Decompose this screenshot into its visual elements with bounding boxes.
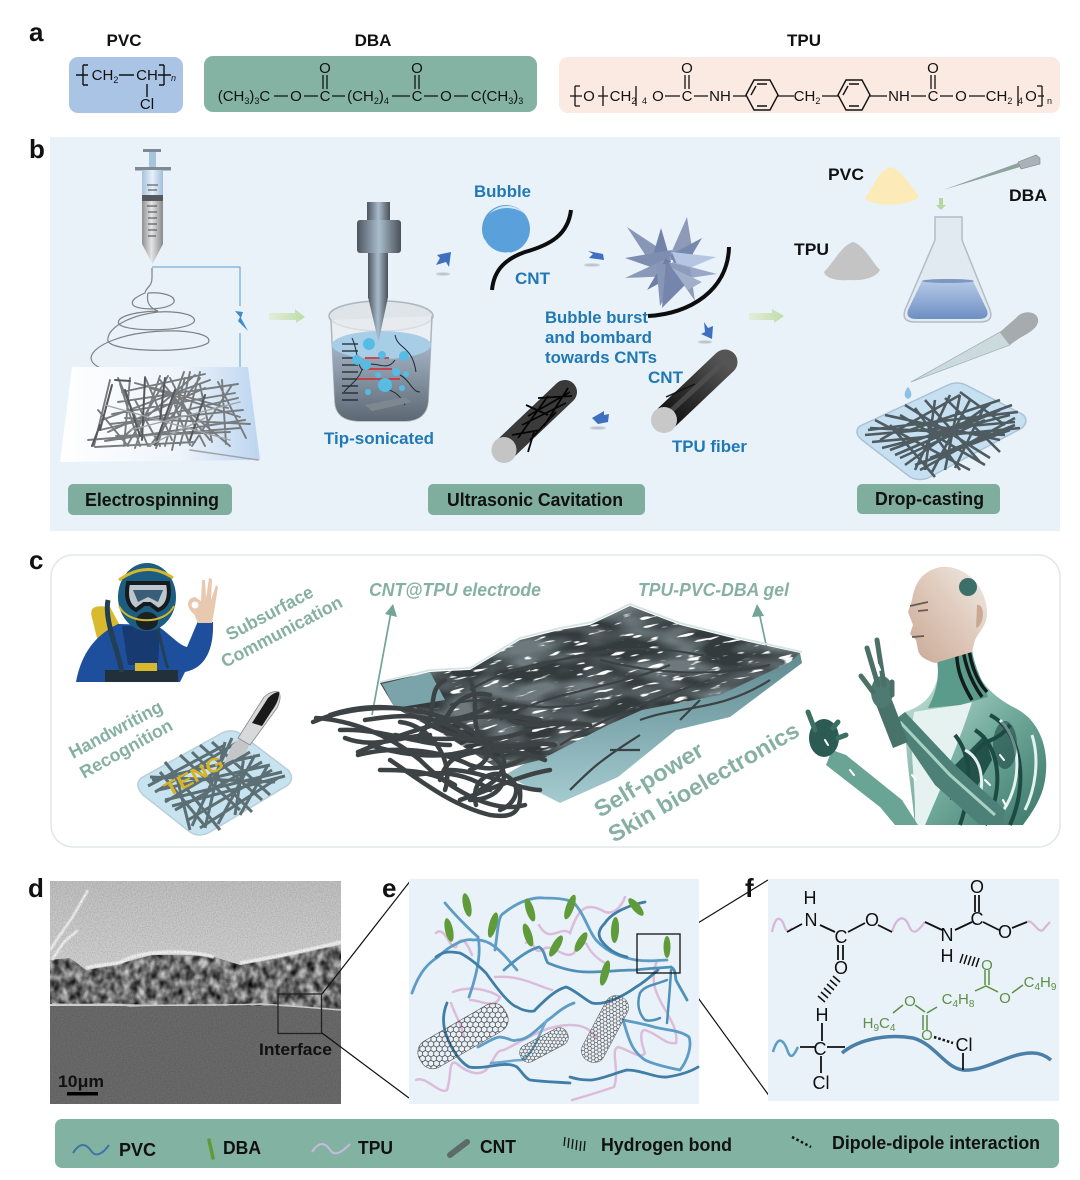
- electrospun jet spiral: [91, 268, 209, 377]
- DBA molecule: 4: [890, 1023, 896, 1034]
- TPU carbamate backbone: H: [804, 888, 816, 908]
- label: tip-sonicated: Tip-sonicated: [324, 429, 434, 448]
- PVC structure card: Cl: [140, 96, 154, 113]
- panel label b: b: [29, 134, 45, 164]
- PVC backbone: Cl: [956, 1035, 972, 1055]
- icon: TPU powder heap: [824, 242, 880, 280]
- legend: TPU: TPU: [358, 1138, 393, 1158]
- DBA structure card: 3: [518, 96, 523, 106]
- CNT wire bundle: [313, 680, 590, 816]
- panel b background: [50, 137, 1060, 531]
- panel label e: e: [382, 873, 396, 903]
- label: CNT: CNT: [515, 269, 551, 288]
- dipole-dipole dots: [934, 1037, 953, 1043]
- legend: CNT: CNT: [480, 1137, 516, 1157]
- step label: electrospinning: Electrospinning: [85, 490, 219, 510]
- label: TPU fiber: TPU fiber: [672, 437, 747, 456]
- interaction background: [768, 879, 1059, 1101]
- handwriting device: [138, 692, 292, 835]
- DBA molecule: [863, 957, 1057, 1044]
- DBA structure card: O: [440, 88, 452, 105]
- TPU structure card: CH: [610, 88, 631, 105]
- label: interface: Interface: [259, 1040, 332, 1059]
- TPU carbamate backbone: O: [865, 910, 879, 930]
- PVC chains: [412, 898, 698, 1083]
- icon: TPU fiber: [651, 358, 728, 433]
- DBA structure card: O: [411, 60, 423, 77]
- TPU structure card: C: [682, 88, 693, 105]
- DBA molecule: O: [999, 990, 1011, 1007]
- benzene ring: [838, 80, 870, 110]
- DBA structure card: ): [249, 88, 254, 105]
- PVC backbone: H: [816, 1005, 828, 1025]
- DBA molecule: C: [942, 991, 952, 1008]
- inset box for panel f: [637, 934, 680, 973]
- shoulder panel: [993, 721, 1017, 769]
- head: [908, 567, 987, 663]
- text: handwriting recognition: Handwriting: [65, 697, 166, 763]
- TPU structure card: O: [583, 88, 595, 105]
- DBA molecule: C: [879, 1015, 890, 1032]
- DBA structure card: (CH: [218, 88, 244, 105]
- DBA molecule: H: [863, 1015, 873, 1032]
- arrow: cavitation to drop-casting: [749, 309, 784, 323]
- DBA structure card: ): [379, 88, 384, 105]
- DBA molecule: 9: [1051, 982, 1057, 993]
- arrow: to electrode: [372, 604, 397, 715]
- label: TPU-PVC-DBA gel: TPU-PVC-DBA gel: [638, 580, 790, 600]
- text: subsurface communication: Communication: [218, 592, 346, 672]
- torso: [905, 668, 1046, 825]
- raised hand palm: [871, 676, 893, 708]
- panel e: polymer network: [382, 873, 699, 1104]
- neck: [928, 650, 988, 708]
- legend: TPU: [312, 1138, 393, 1158]
- TPU structure card: O: [652, 88, 664, 105]
- panel a: chemical structures: [29, 17, 1060, 113]
- DBA molecule: H: [958, 991, 969, 1008]
- SEM micrograph: [50, 881, 341, 1104]
- label: bubble burst text: Bubble burst: [545, 308, 648, 327]
- raised hand fingers: [861, 640, 892, 695]
- TPU structure card: 2: [815, 96, 820, 106]
- network background: [409, 879, 699, 1104]
- text: self-power skin bioelectronics: Self-power: [589, 737, 708, 822]
- electrospun fiber mat: [88, 372, 258, 460]
- panel b: fabrication process: [29, 134, 1060, 531]
- DBA structure card: C: [412, 88, 423, 105]
- PVC backbone: Cl: [812, 1073, 830, 1093]
- DBA structure card: C: [259, 88, 270, 105]
- PVC backbone: [773, 1005, 1051, 1093]
- icon: diver: [76, 563, 218, 682]
- step label: drop-casting: Drop-casting: [875, 489, 984, 509]
- legend: PVC: PVC: [119, 1140, 156, 1160]
- PVC structure card: CH: [92, 67, 113, 84]
- DBA structure card: 2: [374, 96, 379, 106]
- dark ribs and side panels: [950, 735, 992, 800]
- DBA structure card: (CH: [347, 88, 374, 105]
- arrow: to gel: [752, 604, 769, 658]
- arrow: to coated fiber: [590, 411, 609, 430]
- TPU structure card: O: [1025, 88, 1037, 105]
- interface inset box: [278, 994, 322, 1034]
- arrow: electrospinning to cavitation: [269, 309, 305, 323]
- label: CNT near fiber: CNT: [648, 368, 684, 387]
- TPU structure card: NH: [709, 88, 731, 105]
- panel f: molecular interactions: [745, 873, 1059, 1101]
- facial features: [910, 602, 928, 637]
- DBA molecule: 8: [969, 999, 975, 1010]
- TPU structure card: O: [927, 60, 939, 77]
- TPU carbamate backbone: N: [804, 910, 818, 930]
- TPU carbamate backbone: [787, 877, 1027, 978]
- CNT tube large: [413, 999, 513, 1073]
- DBA molecule: 4: [952, 999, 958, 1010]
- step label: ultrasonic cavitation: Ultrasonic Cavitation: [447, 490, 623, 510]
- legend: DBA: DBA: [223, 1138, 261, 1158]
- hydrogen bond hatch: [818, 976, 840, 1002]
- chest highlight: [912, 702, 972, 825]
- TPU wave segments: [772, 918, 1050, 932]
- DBA structure card: C(CH: [471, 88, 508, 105]
- gel slab with CNT network: [380, 603, 802, 803]
- DBA molecule: C: [1024, 974, 1034, 991]
- TPU carbamate backbone: H: [940, 946, 954, 966]
- text: self-power skin bioelectronics: Skin bioelectronics: [604, 717, 804, 847]
- PVC structure card: 2: [113, 75, 118, 85]
- panel label d: d: [28, 873, 44, 903]
- TPU structure card: CH: [986, 88, 1007, 105]
- gel card with CNT mesh: [857, 383, 1026, 480]
- TPU carbamate backbone: C: [834, 927, 848, 947]
- TPU carbamate backbone: N: [940, 925, 954, 945]
- DBA molecule: O: [904, 993, 916, 1010]
- neck cables: [957, 634, 987, 700]
- legend: CNT: [450, 1137, 516, 1157]
- icon: conical flask: [904, 217, 991, 322]
- panel c: applications: [30, 554, 1061, 848]
- icon: PVC powder heap: [865, 167, 919, 205]
- TPU structure card: CH: [794, 88, 815, 105]
- DBA molecule: O: [981, 957, 993, 974]
- TPU structure card: C: [928, 88, 939, 105]
- body highlights: [965, 720, 1036, 815]
- CNT arc: [648, 247, 729, 316]
- icon: tip sonicator beaker: [329, 202, 433, 421]
- text: subsurface communication: Subsurface: [222, 582, 317, 645]
- icon: syringe: [135, 149, 171, 264]
- panel label f: f: [745, 873, 754, 903]
- DBA heading: DBA: [355, 31, 391, 50]
- icon: pen: [224, 692, 280, 764]
- DBA structure card: 3: [244, 96, 249, 106]
- PVC structure card: CH: [136, 67, 158, 84]
- forearm highlight: [900, 722, 995, 815]
- PVC heading: PVC: [107, 31, 141, 50]
- icon: DBA pipette: [943, 155, 1040, 190]
- DBA structure card: [204, 56, 537, 112]
- step label: drop-casting: [857, 484, 1000, 514]
- high-voltage wire with spark: [152, 267, 248, 385]
- TPU structure card: 2: [631, 96, 636, 106]
- PVC backbone: C: [814, 1039, 826, 1059]
- arrow: to TPU fiber: [698, 322, 713, 344]
- DBA structure card: ): [513, 88, 518, 105]
- panel c frame: [51, 555, 1060, 847]
- step label: electrospinning: [68, 484, 232, 515]
- DBA molecule: O: [921, 1027, 933, 1044]
- scale bar 10 µm: 10μm: [58, 1072, 104, 1091]
- text: handwriting recognition: Recognition: [76, 715, 176, 782]
- sparkle points: [825, 665, 1006, 806]
- icon: DBA droplet arrow: [936, 198, 946, 210]
- arrow: to burst: [584, 251, 604, 266]
- label: TPU powder: TPU: [794, 240, 829, 259]
- DBA molecule: 4: [1034, 982, 1040, 993]
- illustration: humanoid robot: [808, 567, 1046, 825]
- DBA structure card: 3: [254, 96, 259, 106]
- DBA structure card: 4: [384, 96, 389, 106]
- DBA molecule: 9: [873, 1023, 879, 1034]
- panel d: SEM image: [28, 873, 341, 1104]
- label: bubble burst text: [545, 308, 657, 367]
- TPU carbamate backbone: O: [834, 958, 848, 978]
- TPU structure card: O: [955, 88, 967, 105]
- TPU carbamate backbone: O: [970, 877, 984, 897]
- icon: dropper: [905, 312, 1038, 399]
- TPU structure card: 4: [642, 96, 647, 106]
- body circuit streaks: [955, 715, 1020, 825]
- DBA molecules: [443, 892, 670, 987]
- TPU structure card: 2: [1007, 96, 1012, 106]
- panel label c: c: [29, 545, 43, 575]
- head implant: [959, 578, 977, 596]
- step label: ultrasonic cavitation: [428, 484, 645, 515]
- PVC structure card: n: [171, 73, 176, 83]
- icon: bubble on CNT: [482, 205, 571, 290]
- PVC structure card: [69, 57, 183, 113]
- DBA structure card: C: [320, 88, 331, 105]
- arrow: to bubble: [436, 252, 451, 276]
- TPU structure card: [559, 57, 1060, 113]
- label: bubble: Bubble: [474, 182, 531, 201]
- panel label a: a: [29, 17, 44, 47]
- legend bar: [55, 1119, 1059, 1168]
- DBA structure card: 3: [508, 96, 513, 106]
- legend: [55, 1119, 1059, 1168]
- ear: [976, 605, 983, 628]
- hydrogen bond hatch: [960, 954, 979, 967]
- label: bubble burst text: and bombard: [545, 328, 652, 347]
- icon: CNT-coated fiber: [492, 388, 572, 463]
- label: PVC powder: PVC: [828, 165, 864, 184]
- label: bubble burst text: towards CNTs: [545, 348, 657, 367]
- CNT tube medium: [578, 992, 632, 1066]
- TPU structure card: 4: [1018, 96, 1023, 106]
- TPU structure card: NH: [888, 88, 910, 105]
- zoom connector lines: [322, 880, 770, 1098]
- TPU carbamate backbone: C: [970, 909, 984, 929]
- DBA molecule: H: [1040, 974, 1051, 991]
- icon: bubble burst star: [625, 217, 717, 308]
- label: DBA: DBA: [1009, 186, 1047, 205]
- TPU structure card: O: [681, 60, 693, 77]
- raised wrist: [875, 700, 908, 748]
- TPU carbamate backbone: O: [998, 922, 1012, 942]
- lower hand fingers: [808, 712, 846, 738]
- legend: PVC: [73, 1140, 156, 1160]
- TPU structure card: n: [1047, 96, 1052, 106]
- lower arm: [826, 750, 918, 825]
- TPU chains: [416, 897, 676, 1100]
- CNT tube small: [517, 1025, 571, 1065]
- TPU heading: TPU: [787, 31, 821, 50]
- label: CNT@TPU electrode: CNT@TPU electrode: [369, 580, 541, 600]
- DBA structure card: O: [290, 88, 302, 105]
- DBA structure card: O: [319, 60, 331, 77]
- legend: hydrogen bond: Hydrogen bond: [601, 1135, 732, 1155]
- benzene ring: [746, 80, 778, 110]
- label: TENG written: TENG: [161, 752, 228, 801]
- legend: dipole-dipole interaction: Dipole-dipole interaction: [832, 1133, 1040, 1153]
- lower hand: [809, 719, 839, 757]
- forearm across body: [892, 712, 1005, 825]
- collector plate: [60, 367, 260, 462]
